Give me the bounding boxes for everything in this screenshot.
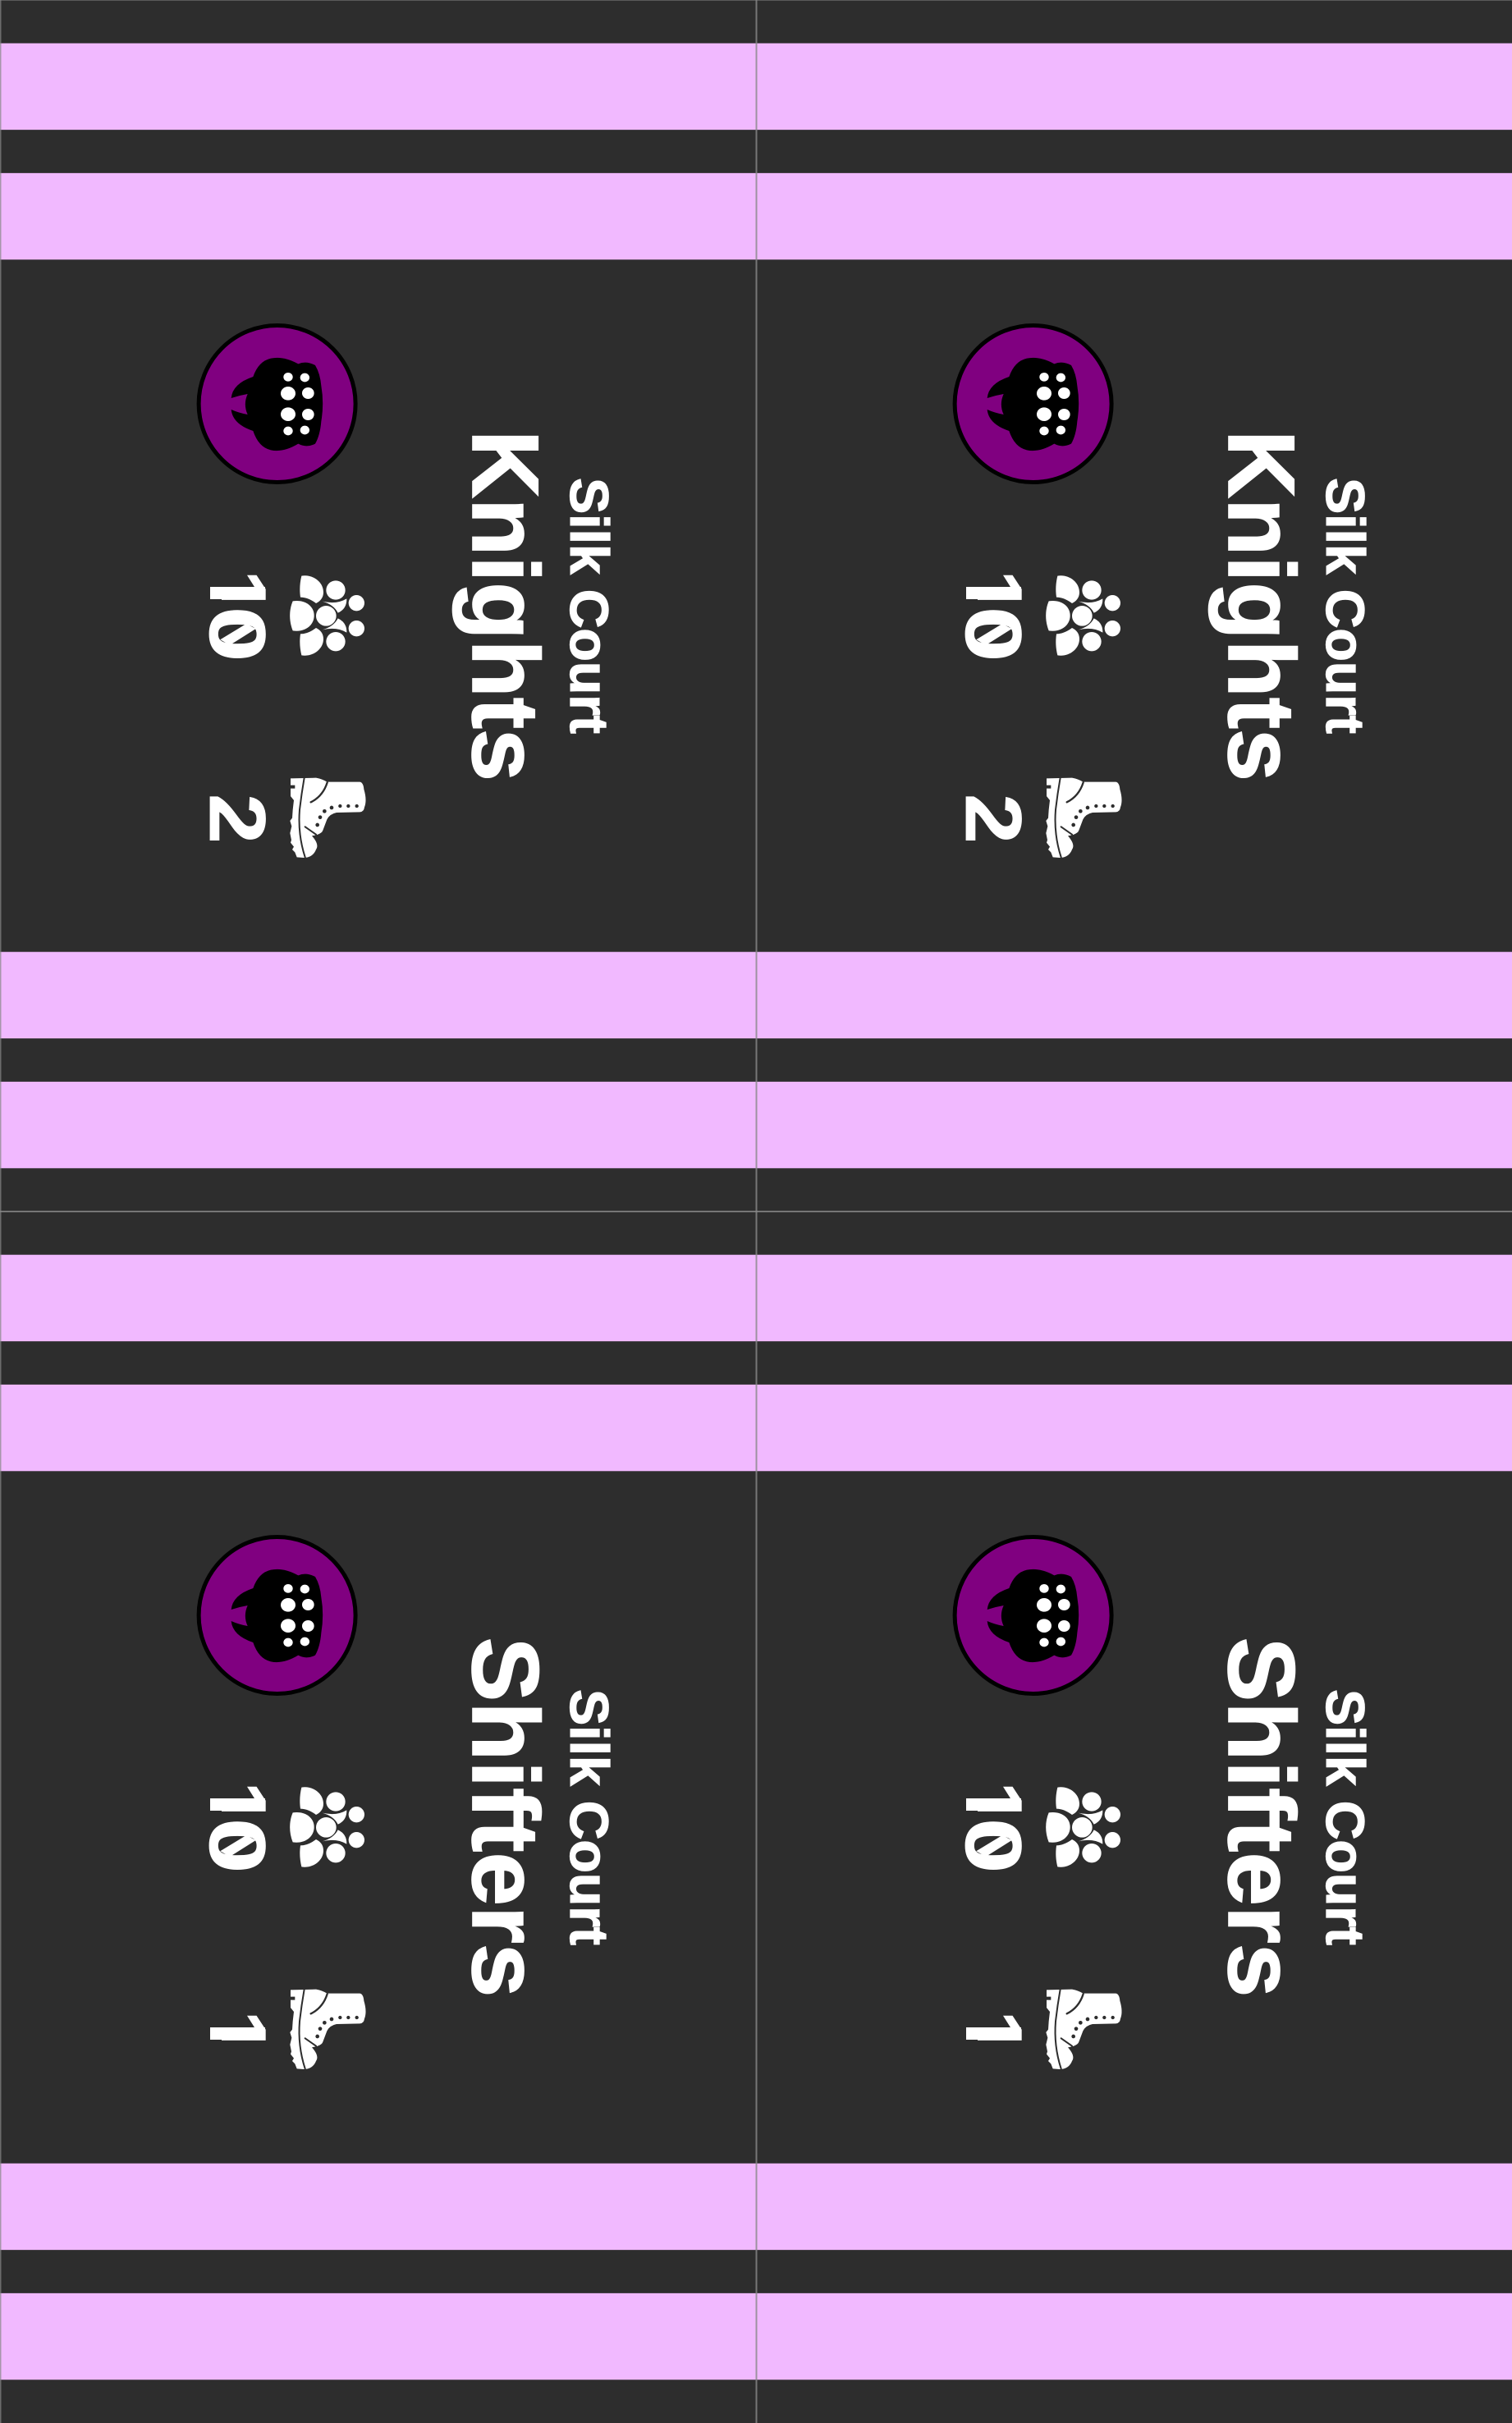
unit name: Knights bbox=[1208, 430, 1313, 781]
card: Shifters (bottom left) bbox=[0, 1255, 756, 2379]
card: Knights (top left) bbox=[0, 44, 756, 1168]
pink bands bbox=[756, 44, 1512, 1168]
card: Shifters (bottom right) bbox=[756, 1255, 1512, 2379]
faction name: Silk Court bbox=[1315, 1689, 1376, 1945]
pink bands bbox=[756, 1255, 1512, 2379]
faction name: Silk Court bbox=[1315, 478, 1376, 734]
pink bands bbox=[0, 44, 756, 1168]
icon: Silk Court faction emblem bbox=[955, 325, 1111, 483]
icon: unit strength bbox=[1046, 1787, 1120, 1867]
faction name: Silk Court bbox=[559, 478, 620, 734]
icon: boot movement bbox=[290, 1990, 366, 2069]
movement value: 1 bbox=[193, 2011, 282, 2054]
unit name: Shifters bbox=[452, 1637, 558, 1997]
strength value: 0 bbox=[949, 607, 1038, 662]
strength value bbox=[193, 1778, 282, 1873]
pink bands bbox=[0, 1255, 756, 2379]
strength value: 1 bbox=[949, 570, 1038, 614]
icon: boot movement bbox=[1046, 778, 1122, 858]
strength value bbox=[949, 1778, 1038, 1873]
faction name: Silk Court bbox=[559, 1689, 620, 1945]
icon: unit strength bbox=[290, 1787, 364, 1867]
strength value: 1 bbox=[193, 1781, 282, 1825]
icon: boot movement bbox=[290, 778, 366, 858]
strength value: 1 bbox=[949, 1781, 1038, 1825]
card: Knights (top right) bbox=[756, 44, 1512, 1168]
strength value: 0 bbox=[949, 1818, 1038, 1873]
icon: boot movement bbox=[1046, 1990, 1122, 2069]
strength value: 0 bbox=[193, 607, 282, 662]
icon: Silk Court faction emblem bbox=[955, 1537, 1111, 1694]
strength value: 1 bbox=[193, 570, 282, 614]
unit name: Knights bbox=[452, 430, 557, 781]
movement value: 2 bbox=[193, 794, 282, 844]
icon: Silk Court faction emblem bbox=[199, 1537, 355, 1694]
strength value bbox=[193, 566, 282, 662]
icon: Silk Court faction emblem bbox=[199, 325, 355, 483]
icon: unit strength bbox=[1046, 575, 1120, 656]
unit name: Shifters bbox=[1208, 1637, 1314, 1997]
movement value: 2 bbox=[949, 794, 1038, 844]
strength value: 0 bbox=[193, 1818, 282, 1873]
icon: unit strength bbox=[290, 575, 364, 656]
movement value: 1 bbox=[949, 2011, 1038, 2054]
strength value bbox=[949, 566, 1038, 662]
